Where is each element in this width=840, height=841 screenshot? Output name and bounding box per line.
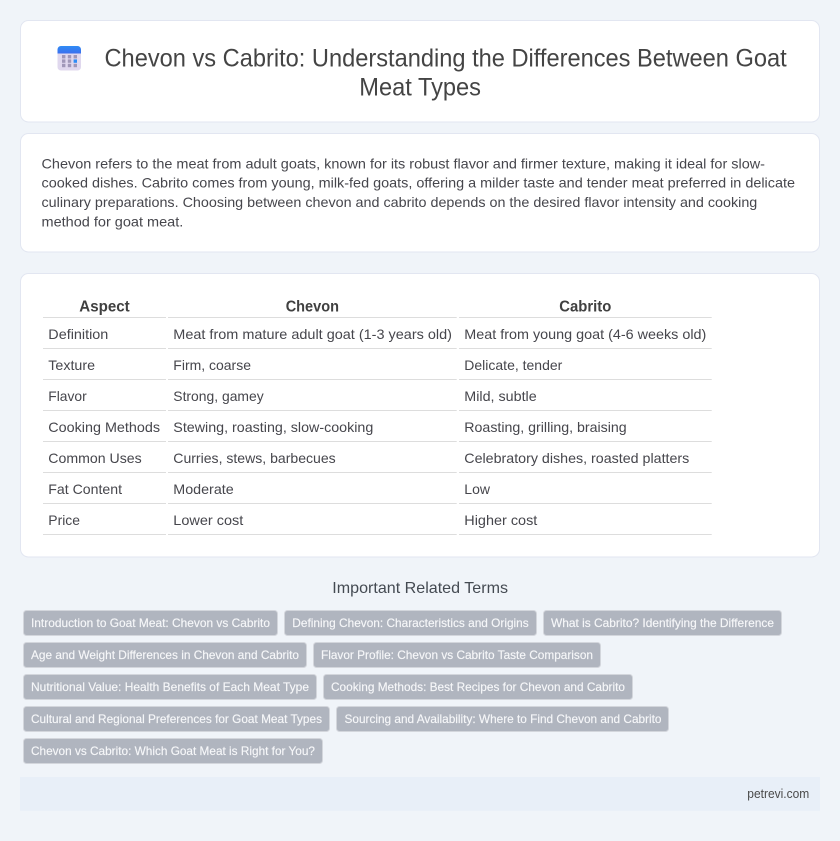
table row: common uses: Common Uses [48, 450, 142, 466]
icon: calendar [58, 46, 81, 70]
table row: fat content: Fat Content [48, 481, 122, 497]
table row: flavor: Flavor [48, 388, 87, 404]
panel: footer [20, 777, 820, 811]
panel: intro paragraph [20, 134, 820, 252]
table row: fat content [48, 481, 491, 497]
table row: definition [48, 326, 706, 342]
text block: intro: Chevon refers to the meat from adult goats, known for its robust flavor and firmer texture, making it ideal for slow- [42, 155, 765, 171]
table header: Cabrito [559, 299, 611, 316]
tag: which goat meat [24, 738, 322, 764]
tag: cooking methods [324, 674, 632, 700]
tag: which goat meat: Chevon vs Cabrito: Which Goat Meat is Right for You? [31, 744, 315, 758]
table row: cooking methods [48, 419, 627, 435]
table row: definition: Definition [48, 326, 108, 342]
table header: Chevon [286, 299, 339, 316]
table row: common uses: Curries, stews, barbecues [173, 450, 336, 466]
table row: texture: Firm, coarse [173, 357, 251, 373]
panel: comparison table [20, 274, 820, 557]
footer credit: petrevi.com [747, 786, 809, 801]
table row: definition: Meat from mature adult goat (1-3 years old) [173, 326, 452, 342]
tag: defining chevon [284, 610, 536, 636]
text block: intro [42, 155, 795, 229]
table row: price [48, 512, 537, 528]
panel: related term tags [24, 610, 782, 764]
table row: cooking methods: Cooking Methods [48, 419, 160, 435]
tag: age and weight [24, 642, 306, 668]
tag: cultural preferences: Cultural and Regional Preferences for Goat Meat Types [31, 712, 322, 726]
panel: title header [20, 20, 820, 122]
tag: what is cabrito: What is Cabrito? Identifying the Difference [551, 616, 774, 630]
tag: nutritional value: Nutritional Value: Health Benefits of Each Meat Type [31, 680, 309, 694]
table row: common uses: Celebratory dishes, roasted platters [464, 450, 689, 466]
table row: definition: Meat from young goat (4-6 weeks old) [464, 326, 706, 342]
text block: intro: cooked dishes. Cabrito comes from young, milk-fed goats, offering a milder taste and tender meat preferred in delicate [42, 175, 795, 191]
table row: cooking methods: Roasting, grilling, braising [464, 419, 627, 435]
tag: defining chevon: Defining Chevon: Characteristics and Origins [292, 616, 529, 630]
table row: price: Price [48, 512, 80, 528]
text block: intro: culinary preparations. Choosing between chevon and cabrito depends on the desired flavor intensity and cooking [42, 194, 757, 210]
tag: flavor profile: Flavor Profile: Chevon vs Cabrito Taste Comparison [321, 648, 593, 662]
table row: price: Lower cost [173, 512, 243, 528]
table row: texture: Delicate, tender [464, 357, 563, 373]
tag: age and weight: Age and Weight Differences in Chevon and Cabrito [31, 648, 299, 662]
text block: intro: method for goat meat. [42, 213, 183, 229]
tag: cooking methods: Cooking Methods: Best Recipes for Chevon and Cabrito [331, 680, 625, 694]
table row: cooking methods: Stewing, roasting, slow-cooking [173, 419, 373, 435]
table header [79, 299, 611, 316]
table row: flavor: Mild, subtle [464, 388, 537, 404]
table row: common uses [48, 450, 689, 466]
table row: flavor [48, 388, 537, 404]
tag: sourcing: Sourcing and Availability: Where to Find Chevon and Cabrito [344, 712, 662, 726]
tag: cultural preferences [24, 706, 330, 732]
table row: flavor: Strong, gamey [173, 388, 264, 404]
tag: nutritional value [24, 674, 316, 700]
tag: introduction: Introduction to Goat Meat: Chevon vs Cabrito [31, 616, 270, 630]
tag: sourcing [336, 706, 668, 732]
table row: texture [48, 357, 563, 373]
tag: flavor profile [314, 642, 600, 668]
title [104, 45, 787, 102]
title: Chevon vs Cabrito: Understanding the Differences Between Goat [104, 45, 787, 73]
tag: what is cabrito [544, 610, 782, 636]
table row: fat content: Moderate [173, 481, 234, 497]
title: Meat Types [359, 74, 481, 102]
table header: Aspect [79, 299, 130, 316]
heading: related terms: Important Related Terms [332, 580, 508, 597]
table row: price: Higher cost [464, 512, 537, 528]
table row: fat content: Low [464, 481, 491, 497]
tag: introduction [24, 610, 278, 636]
table row: texture: Texture [48, 357, 95, 373]
